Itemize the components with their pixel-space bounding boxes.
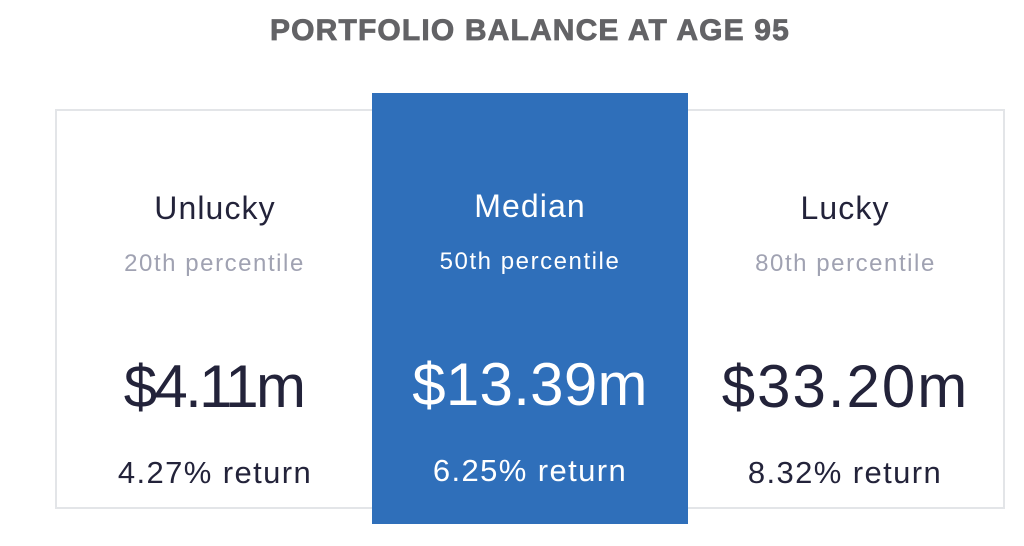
- panel: median: [372, 93, 688, 524]
- lucky percentile: 80th percentile: [755, 250, 936, 277]
- unlucky return: 4.27% return: [118, 455, 312, 490]
- unlucky balance: $4.11m: [124, 353, 303, 420]
- median heading: Median: [474, 188, 586, 224]
- median balance: $13.39m: [412, 351, 648, 418]
- title: PORTFOLIO BALANCE AT AGE 95: [270, 14, 790, 47]
- lucky return: 8.32% return: [748, 455, 942, 490]
- lucky balance: $33.20m: [722, 353, 969, 420]
- panel: lucky: [722, 190, 969, 490]
- lucky heading: Lucky: [800, 190, 890, 226]
- unlucky heading: Unlucky: [154, 190, 276, 226]
- median return: 6.25% return: [433, 453, 627, 488]
- median percentile: 50th percentile: [440, 248, 620, 275]
- panel: outer card: [55, 109, 1005, 509]
- unlucky percentile: 20th percentile: [124, 250, 305, 277]
- panel: unlucky: [118, 190, 312, 490]
